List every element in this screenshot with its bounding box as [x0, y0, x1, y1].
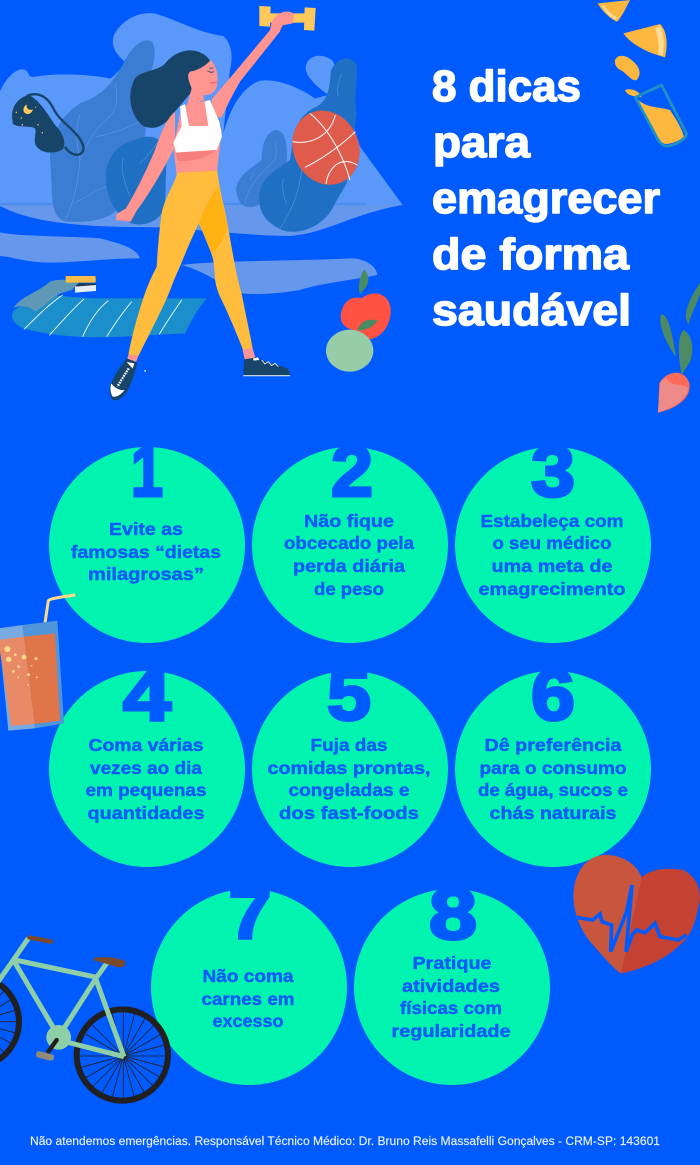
hair: [130, 50, 211, 128]
ankles: [127, 347, 256, 365]
frame: [0, 938, 124, 1057]
panel: tip circle 6: [455, 656, 651, 867]
panel: tip circle 7: [151, 874, 347, 1085]
torso: [173, 100, 222, 175]
panel: tip circle 3: Estabeleça com: [480, 511, 624, 531]
panel: tip circle 5: congeladas e: [288, 780, 410, 800]
panel: tip circle 8: físicas com: [400, 998, 502, 1018]
title: saudável: [432, 286, 631, 335]
panel: tip circle 5: comidas prontas,: [268, 758, 430, 778]
icon: sleep mask: [12, 94, 83, 155]
icon: left shoe: [109, 358, 137, 401]
lowered arm: [116, 112, 175, 222]
panel: tip circle 6: de água, sucos e: [478, 780, 628, 800]
panel: tip circle 3: 3: [531, 432, 575, 512]
panel: tip circle 4: [49, 656, 245, 867]
icon: juice glass with flying fruit slices: [598, 0, 687, 146]
icon: bicycle: [0, 937, 168, 1101]
panel: tip circle 2: obcecado pela: [284, 533, 414, 553]
icon: red apple: [341, 269, 391, 339]
panel: tip circle 2: [252, 432, 448, 643]
title: emagrecer: [432, 174, 660, 223]
panel: tip circle 4: em pequenas: [86, 780, 207, 800]
panel: tip circle 8: regularidade: [392, 1021, 511, 1041]
leggings: [128, 171, 253, 356]
panel: tip circle 5: Fuja das: [310, 735, 388, 755]
panel: tip circle 2: de peso: [314, 579, 384, 599]
title: para: [433, 118, 531, 167]
panel: tip circle 8: 8: [429, 875, 477, 955]
panel: tip circle 3: o seu médico: [492, 533, 612, 553]
icon: radish with leaves: [658, 283, 700, 413]
panel: tip circle 4: quantidades: [88, 803, 205, 823]
panel: tip circle 1: Evite as: [109, 519, 183, 539]
front wheel: [0, 976, 19, 1067]
panel: tip circle 7: 7: [228, 874, 272, 954]
panel: tip circle 5: 5: [327, 656, 371, 736]
footer disclaimer: Não atendemos emergências. Responsável Técnico Médico: Dr. Bruno Reis Massafelli Gonçalves - CRM-SP: 143601: [30, 1136, 660, 1148]
icon: basketball: [280, 99, 372, 196]
panel: tip circle 4: Coma várias: [88, 735, 204, 755]
background hills: [0, 13, 403, 206]
panel: tip circle 6: chás naturais: [490, 803, 617, 823]
panel: tip circle 4: 4: [123, 656, 171, 736]
panel: tip circle 3: uma meta de: [492, 556, 613, 576]
panel: tip circle 2: 2: [331, 432, 373, 512]
raised arm: [212, 29, 281, 117]
title: [432, 62, 660, 335]
panel: tip circle 6: 6: [531, 656, 575, 736]
panel: tip circle 6: para o consumo: [480, 758, 626, 778]
panel: tip circle 7: carnes em: [202, 989, 294, 1009]
panel: tip circle 5: [252, 656, 448, 867]
title: 8 dicas: [432, 62, 581, 111]
panel: tip circle 2: Não fique: [304, 511, 394, 531]
lower ground band: [0, 204, 403, 236]
stray dot: [144, 370, 146, 372]
panel: tip circle 5: dos fast-foods: [279, 803, 419, 823]
rear wheel: [77, 1009, 168, 1101]
mid clouds: [0, 232, 140, 263]
foliage: [50, 40, 357, 232]
panel: tip circle 1: milagrosas”: [88, 564, 204, 584]
panel: tip circle 2: perda diária: [293, 556, 405, 576]
panel: tip circle 3: emagrecimento: [478, 579, 626, 599]
panel: tip circle 8: [354, 875, 550, 1085]
panel: tip circle 8: Pratique: [412, 953, 492, 973]
white top: [173, 100, 222, 153]
title: de forma: [432, 230, 630, 279]
panel: tip circle 4: vezes ao dia: [90, 758, 202, 778]
panel: tip circle 1: famosas “dietas: [71, 542, 221, 562]
icon: juice glass with straw: [0, 595, 75, 731]
panel: tip circle 1: 1: [131, 432, 163, 512]
panel: tip circle 3: [455, 432, 651, 643]
woman figure: [109, 6, 316, 401]
illustration: woman exercising with background foliage: [0, 6, 403, 401]
panel: tip circle 7: Não coma: [202, 966, 294, 986]
panel: tip circle 7: excesso: [212, 1011, 284, 1031]
icon: heart with heartbeat line: [573, 855, 700, 973]
panel: tip circle 1: [49, 432, 245, 643]
icon: right shoe: [243, 357, 290, 376]
face and neck: [187, 60, 218, 107]
icon: green apple: [326, 330, 373, 372]
panel: tip circle 8: atividades: [402, 976, 500, 996]
icon: yoga mat and books: [12, 276, 207, 337]
icon: dumbbell: [259, 6, 316, 32]
panel: tip circle 6: Dê preferência: [484, 735, 622, 755]
